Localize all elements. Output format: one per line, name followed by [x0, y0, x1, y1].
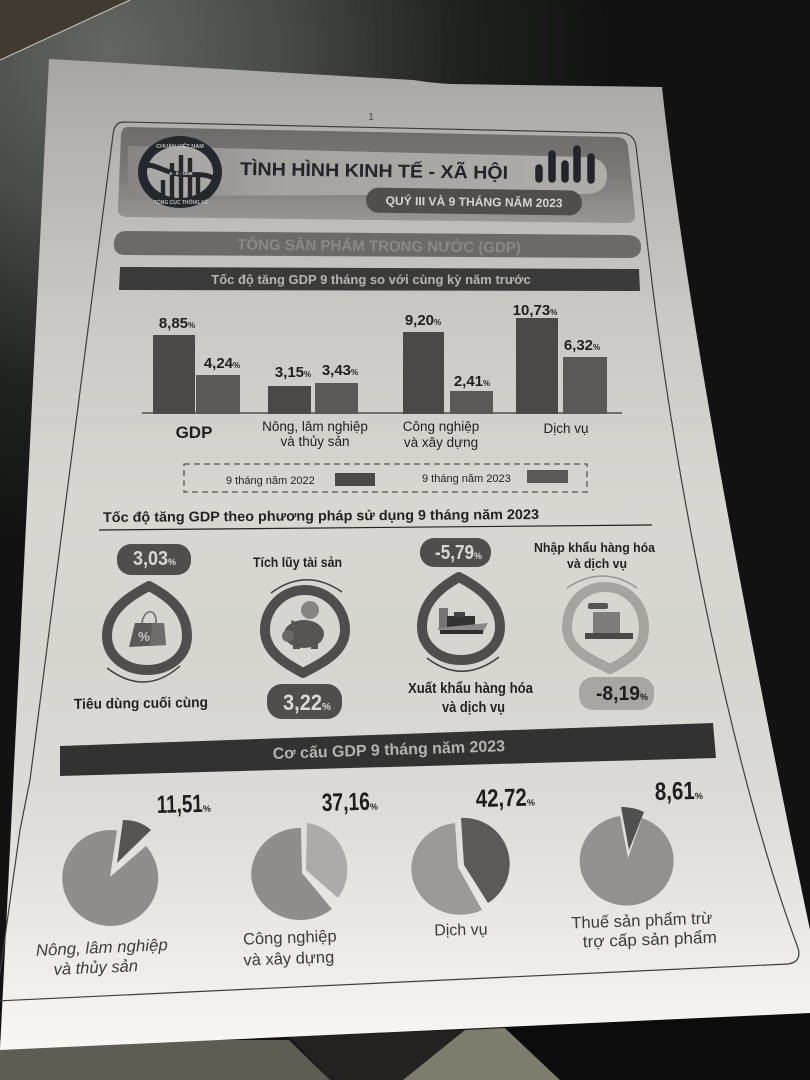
pie: agriculture: Nông, lâm nghiệp — [35, 936, 168, 960]
pie: industry: 37,16 — [321, 788, 370, 817]
icon: bar chart — [539, 149, 591, 180]
label — [534, 540, 656, 571]
label: và dịch vụ — [442, 699, 505, 716]
pie: agriculture: và thủy sản — [53, 957, 138, 979]
icon: cargo ship drop — [422, 577, 500, 671]
pie: industry: % — [370, 802, 378, 812]
pill value: % — [474, 551, 482, 561]
legend — [184, 464, 587, 492]
label — [408, 680, 534, 716]
category labels: GDP — [176, 423, 212, 442]
icon: piggy bank drop — [265, 580, 345, 673]
pie: industry — [243, 788, 378, 970]
bars: GDP: 4,24% — [204, 355, 240, 372]
title: TÌNH HÌNH KINH TẾ - XÃ HỘI — [240, 158, 508, 183]
pie: services: Dịch vụ — [434, 922, 488, 939]
category labels: Công nghiệp — [403, 419, 479, 434]
bars: industry: 9,20% — [405, 312, 441, 329]
pill value: 3,03 — [133, 548, 168, 570]
pill value — [117, 544, 191, 575]
heading bar: growth by sector — [119, 267, 640, 291]
bars: services — [513, 302, 607, 414]
heading bar: GDP structure: Cơ cấu GDP 9 tháng năm 2023 — [272, 738, 505, 763]
icon: statistics office logo — [138, 136, 222, 208]
heading: growth by expenditure: Tốc độ tăng GDP theo phương pháp sử dụng 9 tháng năm 2023 — [103, 506, 539, 525]
icon: shopping bag drop: % — [138, 629, 150, 644]
heading bar: growth by sector: Tốc độ tăng GDP 9 tháng so với cùng kỳ năm trước — [211, 272, 531, 287]
icon: shopping bag drop — [107, 586, 187, 682]
pill value: % — [168, 557, 176, 567]
pie: product taxes: trợ cấp sản phẩm — [583, 929, 717, 951]
pill value: -8,19 — [596, 683, 640, 705]
category labels: Dịch vụ — [543, 421, 589, 436]
pie: industry: Công nghiệp — [243, 927, 337, 949]
category labels: và thủy sản — [280, 434, 350, 449]
label: Tích lũy tài sản — [253, 555, 342, 570]
pie: agriculture: % — [203, 804, 211, 814]
subtitle pill: QUÝ III VÀ 9 THÁNG NĂM 2023 — [385, 193, 563, 210]
panel: header banner — [118, 127, 635, 223]
item: exports — [408, 538, 534, 716]
pie: services: % — [527, 797, 535, 808]
category labels: Nông, lâm nghiệp — [262, 419, 368, 434]
bars: industry — [403, 312, 493, 414]
label: và dịch vụ — [567, 556, 627, 571]
pill value — [420, 538, 491, 567]
pill value: % — [640, 692, 648, 702]
icon: cash register drop — [567, 576, 644, 669]
pie: product taxes: Thuế sản phẩm trừ — [571, 910, 713, 932]
bars: GDP: 8,85% — [159, 315, 195, 332]
bars: services: 10,73% — [513, 302, 557, 319]
page number: 1 — [368, 112, 374, 123]
icon: statistics office logo: CHUẨN VIỆT NAM — [156, 142, 204, 150]
pill value: 3,22 — [283, 690, 322, 715]
bars: services: 6,32% — [564, 337, 600, 354]
pie: agriculture — [35, 790, 211, 979]
category labels: và xây dựng — [404, 435, 478, 450]
pill value — [267, 684, 342, 719]
legend: 9 tháng năm 2023 — [422, 473, 511, 485]
pie: services: 42,72 — [475, 784, 527, 813]
pie: services — [411, 783, 535, 939]
label: Nhập khẩu hàng hóa — [534, 540, 656, 555]
icon: statistics office logo: 6 - 5 - 1946 — [169, 171, 193, 176]
bars: agriculture: 3,15% — [275, 364, 311, 381]
bars: agriculture — [268, 362, 358, 414]
icon: statistics office logo: TỔNG CỤC THỐNG KÊ — [154, 198, 209, 206]
pill value: -5,79 — [435, 542, 474, 564]
pie: agriculture: 11,51 — [156, 790, 203, 819]
section heading: GDP: TỔNG SẢN PHẨM TRONG NƯỚC (GDP) — [237, 236, 521, 256]
bars: agriculture: 3,43% — [322, 362, 358, 379]
bars: GDP — [153, 315, 240, 414]
bars: industry: 2,41% — [454, 373, 490, 390]
pill value — [579, 677, 654, 710]
label: Xuất khẩu hàng hóa — [408, 680, 534, 697]
heading bar: GDP structure — [60, 723, 716, 776]
pie: industry: và xây dựng — [243, 948, 335, 970]
pie: product taxes — [571, 777, 717, 951]
section heading: GDP — [114, 231, 641, 258]
item: capital accumulation — [253, 555, 345, 719]
category labels — [176, 419, 589, 450]
item: imports — [534, 540, 656, 710]
pill value: % — [322, 702, 331, 713]
subtitle pill — [366, 187, 582, 216]
pie: product taxes: 8,61 — [654, 777, 695, 806]
legend: 9 tháng năm 2022 — [226, 475, 315, 487]
label: Tiêu dùng cuối cùng — [74, 695, 208, 713]
bar chart: GDP growth by sector — [142, 302, 622, 450]
heading: growth by expenditure — [99, 506, 652, 530]
item: final consumption — [74, 544, 208, 713]
pie: product taxes: % — [695, 791, 703, 801]
